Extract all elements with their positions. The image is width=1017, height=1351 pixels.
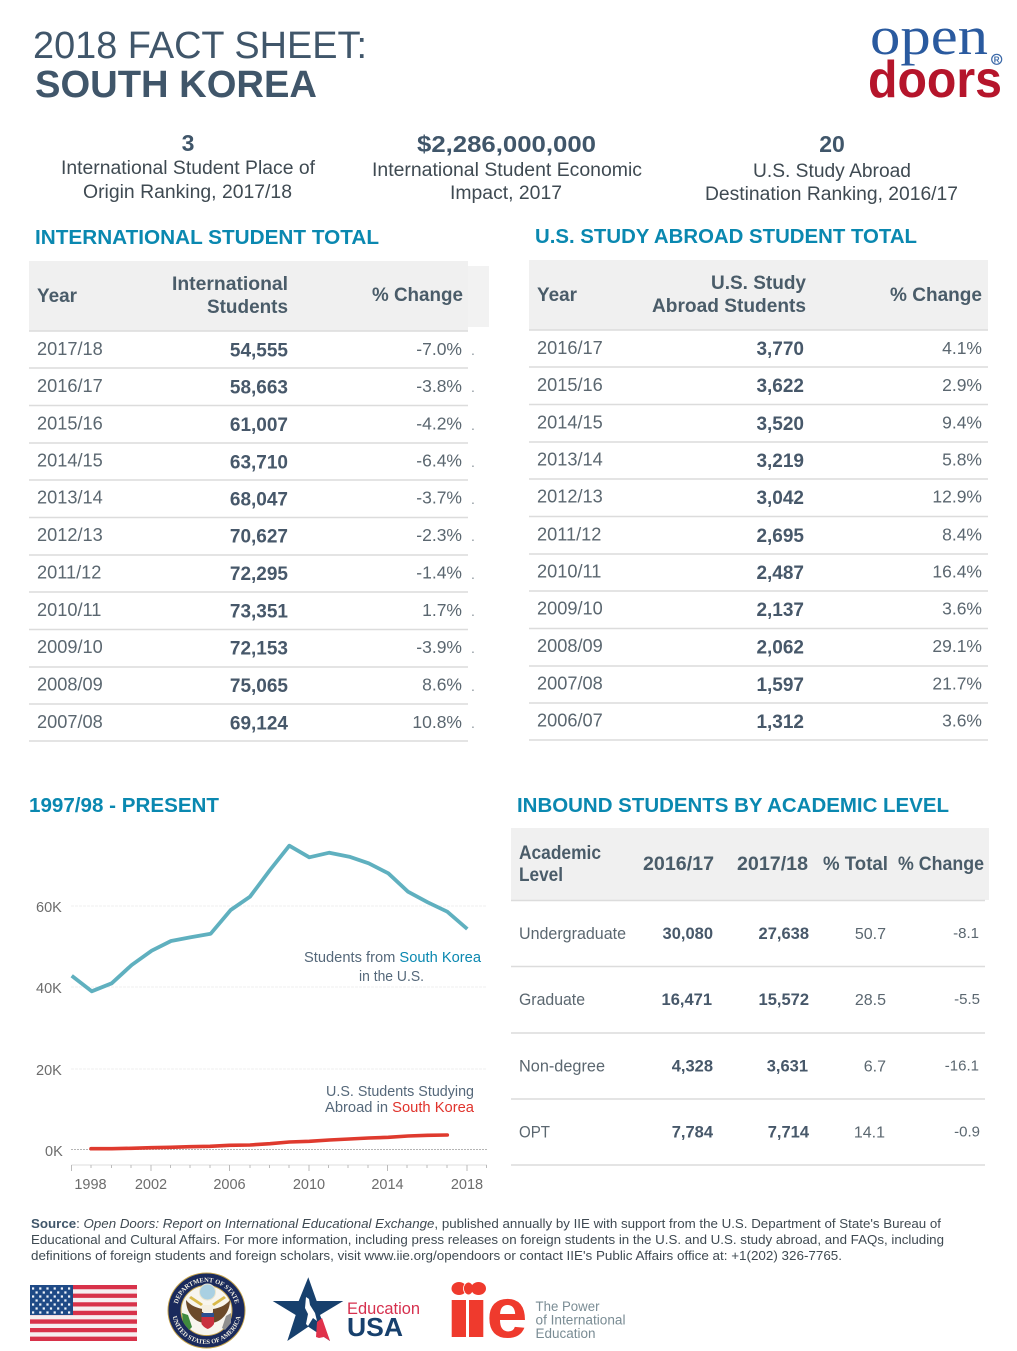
line: U.S. students studying abroad in South Korea [91, 1135, 447, 1149]
table: inbound students by academic level [511, 828, 989, 1165]
icon: Department of State seal [168, 1272, 246, 1348]
icon: Department of State seal: UNITED STATES OF AMERICA [172, 1316, 240, 1344]
table: international student total: 2010/11 [37, 600, 101, 620]
table: inbound students by academic level: % Total [823, 854, 888, 875]
source note [31, 1216, 944, 1263]
table: international student total: . [471, 454, 475, 470]
stat: economic impact: Impact, 2017 [450, 183, 562, 204]
table: us study abroad student total: 2015/16 [537, 375, 603, 395]
line chart: students 1997/98 to present: 40K [36, 981, 62, 997]
table: international student total: 61,007 [230, 415, 288, 436]
stat: study abroad destination ranking [705, 131, 958, 205]
table: us study abroad student total: 1,312 [756, 712, 804, 733]
line chart: students 1997/98 to present: 2006 [213, 1177, 246, 1193]
table: us study abroad student total: 2,062 [756, 638, 804, 658]
table: international student total: 72,295 [230, 564, 288, 585]
line chart: students 1997/98 to present: 2010 [293, 1177, 325, 1193]
table: us study abroad student total: 2010/11 [537, 562, 601, 582]
stat: place of origin ranking [61, 130, 316, 203]
table: international student total: -4.2% [416, 414, 462, 434]
title: SOUTH KOREA [35, 64, 317, 106]
table: inbound students by academic level: 2016/17 [643, 854, 714, 875]
table: inbound students by academic level: Level [519, 865, 563, 886]
table: us study abroad student total: Year [537, 285, 578, 306]
heading: international student total: INTERNATIONAL STUDENT TOTAL [35, 227, 379, 249]
table: inbound students by academic level: 14.1 [854, 1124, 885, 1142]
table: us study abroad student total: 3.6% [942, 598, 982, 618]
table: us study abroad student total: 1,597 [756, 675, 804, 696]
table: us study abroad student total: 2009/10 [537, 598, 603, 618]
table: us study abroad student total: 3,042 [756, 488, 804, 509]
table: international student total: -2.3% [416, 525, 462, 545]
heading: 1997/98 - present: 1997/98 - PRESENT [29, 795, 219, 817]
stat: place of origin ranking: International Student Place of [61, 158, 316, 179]
table: inbound students by academic level: 2017/18 [737, 854, 808, 875]
icon: IIE logo [452, 1274, 626, 1351]
table: international student total: Students [207, 297, 288, 318]
table: us study abroad student total: 29.1% [932, 636, 982, 656]
table: international student total: 68,047 [230, 490, 288, 510]
table: us study abroad student total: 2,695 [756, 526, 804, 547]
icon: EducationUSA logo: USA [347, 1312, 403, 1342]
table: international student total: -7.0% [416, 339, 462, 359]
table: international student total: . [471, 603, 475, 619]
table: us study abroad student total: 5.8% [942, 450, 982, 470]
title [33, 25, 367, 106]
table: international student total: 2007/08 [37, 712, 103, 732]
table: inbound students by academic level: -5.5 [954, 991, 980, 1008]
heading: inbound students by academic level: INBOUND STUDENTS BY ACADEMIC LEVEL [517, 795, 949, 817]
line chart: students 1997/98 to present: 2002 [135, 1177, 167, 1193]
stat: place of origin ranking: 3 [182, 130, 194, 156]
table: international student total: 54,555 [230, 340, 288, 362]
table: international student total: . [471, 417, 475, 433]
table: international student total: . [471, 528, 475, 544]
annotation: U.S. students abroad [325, 1083, 475, 1116]
logo: open doors [868, 6, 1002, 109]
line chart: students 1997/98 to present [36, 846, 487, 1193]
table: us study abroad student total: 3,622 [756, 376, 804, 397]
annotation: students from South Korea: in the U.S. [359, 968, 424, 985]
icon: IIE logo: of International [536, 1312, 626, 1328]
table: international student total: 2015/16 [37, 414, 103, 434]
table: us study abroad student total: 2014/15 [537, 412, 603, 432]
table: international student total: 2017/18 [37, 339, 103, 359]
table: international student total: 8.6% [422, 674, 462, 694]
table: us study abroad student total: 2013/14 [537, 450, 603, 470]
table: us study abroad student total: 2007/08 [537, 674, 603, 694]
table: international student total: 2016/17 [37, 376, 103, 396]
table: us study abroad student total [529, 260, 988, 740]
stat: place of origin ranking: Origin Ranking, 2017/18 [83, 182, 292, 203]
table: inbound students by academic level: 7,784 [672, 1124, 714, 1142]
title: 2018 FACT SHEET: [33, 25, 367, 67]
icon: IIE logo: The Power [536, 1299, 600, 1314]
table: international student total: . [471, 640, 475, 656]
source note: Source: Open Doors: Report on International Educational Exchange , published annually by IIE with support from the U.S. Department of State's Bureau of [31, 1216, 941, 1231]
table: international student total: . [471, 715, 475, 731]
table: inbound students by academic level: 28.5 [855, 992, 886, 1009]
table: inbound students by academic level: OPT [519, 1124, 550, 1142]
table: inbound students by academic level: Non-degree [519, 1058, 605, 1076]
table: inbound students by academic level: Academic [519, 843, 601, 864]
table: international student total: -3.8% [416, 376, 462, 396]
stat: economic impact: $2,286,000,000 [417, 131, 596, 157]
stat: economic impact: International Student Economic [372, 160, 642, 181]
table: international student total: . [471, 342, 475, 358]
table: inbound students by academic level: -16.1 [945, 1058, 979, 1074]
annotation: students from South Korea [304, 949, 482, 985]
table: us study abroad student total: 2.9% [942, 375, 982, 395]
line chart: students 1997/98 to present: 60K [36, 900, 62, 916]
table: us study abroad student total: U.S. Study [711, 273, 806, 294]
table: inbound students by academic level: 3,631 [767, 1058, 808, 1076]
table: us study abroad student total: 4.1% [942, 338, 982, 358]
table: inbound students by academic level: 27,638 [759, 925, 809, 943]
table: inbound students by academic level: -8.1 [953, 925, 979, 942]
table: international student total: . [471, 491, 475, 507]
table: international student total: . [471, 379, 475, 395]
table: inbound students by academic level: % Change [898, 854, 984, 875]
line: students from South Korea in the U.S. [72, 846, 467, 991]
table: us study abroad student total: 2,137 [756, 600, 804, 621]
table: us study abroad student total: 2008/09 [537, 636, 603, 656]
table: us study abroad student total: % Change [890, 285, 982, 306]
table: international student total: Year [37, 286, 78, 307]
table: us study abroad student total: 2,487 [756, 563, 804, 584]
icon: EducationUSA logo [273, 1277, 420, 1342]
table: international student total: % Change [372, 285, 463, 306]
table: international student total: -3.7% [416, 488, 462, 508]
table: us study abroad student total: 2011/12 [537, 524, 601, 544]
table: us study abroad student total: 21.7% [932, 674, 982, 694]
stat: study abroad destination ranking: 20 [819, 131, 845, 157]
table: us study abroad student total: 2012/13 [537, 486, 603, 506]
table: international student total: 1.7% [422, 600, 462, 620]
line chart: students 1997/98 to present: 20K [36, 1063, 62, 1079]
table: international student total: 63,710 [230, 452, 288, 474]
table: international student total: -6.4% [416, 450, 462, 470]
table: international student total: 58,663 [230, 378, 288, 398]
table: us study abroad student total: 3,770 [756, 339, 804, 360]
table: international student total: . [471, 678, 475, 694]
table: us study abroad student total: 8.4% [942, 524, 982, 544]
table: inbound students by academic level: 30,080 [663, 925, 713, 943]
table: inbound students by academic level: 15,572 [759, 991, 809, 1009]
table: us study abroad student total: 2006/07 [537, 710, 603, 730]
table: us study abroad student total: 3,219 [756, 451, 804, 472]
table: international student total: 2014/15 [37, 450, 103, 470]
line chart: students 1997/98 to present: 1998 [74, 1177, 107, 1193]
table: international student total: -3.9% [416, 637, 462, 657]
line chart: students 1997/98 to present: 0K [45, 1144, 63, 1160]
line chart: students 1997/98 to present: 2014 [371, 1177, 404, 1193]
stat: study abroad destination ranking: U.S. Study Abroad [753, 161, 911, 182]
stat: economic impact [372, 131, 642, 204]
logo: open doors: open [870, 6, 988, 66]
table: international student total: 2011/12 [37, 562, 101, 582]
table: international student total: 2008/09 [37, 674, 103, 694]
table: international student total: International [172, 274, 288, 295]
table: international student total: -1.4% [416, 562, 462, 582]
table: international student total: 2009/10 [37, 637, 103, 657]
icon: U.S. flag [30, 1285, 137, 1341]
table: inbound students by academic level: Undergraduate [519, 925, 626, 943]
table: international student total: 2013/14 [37, 488, 103, 508]
table: us study abroad student total: 16.4% [932, 562, 982, 582]
icon: IIE logo: Education [536, 1326, 596, 1341]
annotation: U.S. students abroad: Abroad in South Korea [325, 1099, 475, 1116]
table: international student total: . [471, 566, 475, 582]
logo: open doors: R [994, 55, 1000, 64]
icon: Department of State seal: DEPARTMENT OF STATE [174, 1278, 240, 1304]
source note: definitions of foreign students and foreign scholars, visit www.iie.org/opendoors or contact IIE's Public Affairs office at: +1(202) 326-7765. [31, 1248, 842, 1263]
table: inbound students by academic level: 7,714 [768, 1124, 810, 1142]
source note: Educational and Cultural Affairs. For more information, including press releases on foreign students in the U.S. and U.S. study abroad, and FAQs, including [31, 1232, 944, 1247]
table: international student total: 2012/13 [37, 525, 103, 545]
stat: study abroad destination ranking: Destination Ranking, 2016/17 [705, 184, 958, 205]
line chart: students 1997/98 to present: 2018 [451, 1177, 483, 1193]
table: international student total: 69,124 [230, 714, 288, 734]
table: international student total: 72,153 [230, 638, 288, 660]
table: inbound students by academic level: Graduate [519, 991, 585, 1009]
table: us study abroad student total: 2016/17 [537, 338, 603, 358]
table: inbound students by academic level: 4,328 [672, 1058, 713, 1076]
table: us study abroad student total: 3.6% [942, 710, 982, 730]
table: international student total: 70,627 [230, 526, 288, 548]
table: us study abroad student total: 3,520 [756, 414, 804, 435]
table: inbound students by academic level: 50.7 [855, 926, 886, 943]
table: international student total: 10.8% [412, 712, 462, 732]
annotation: U.S. students abroad: U.S. Students Studying [326, 1083, 474, 1100]
table: us study abroad student total: 12.9% [932, 486, 982, 506]
table: us study abroad student total: Abroad Students [652, 296, 806, 317]
table: inbound students by academic level: 16,471 [662, 991, 712, 1009]
table: international student total: 75,065 [230, 676, 288, 697]
heading: us study abroad student total: U.S. STUDY ABROAD STUDENT TOTAL [535, 226, 917, 248]
table: inbound students by academic level: -0.9 [954, 1124, 980, 1140]
table: inbound students by academic level: 6.7 [864, 1058, 886, 1076]
annotation: students from South Korea: Students from South Korea [304, 949, 482, 966]
table: international student total [29, 261, 489, 741]
table: international student total: 73,351 [230, 602, 288, 622]
icon: EducationUSA logo: Education [347, 1299, 420, 1318]
logo: open doors: doors [868, 51, 1002, 109]
table: us study abroad student total: 9.4% [942, 412, 982, 432]
